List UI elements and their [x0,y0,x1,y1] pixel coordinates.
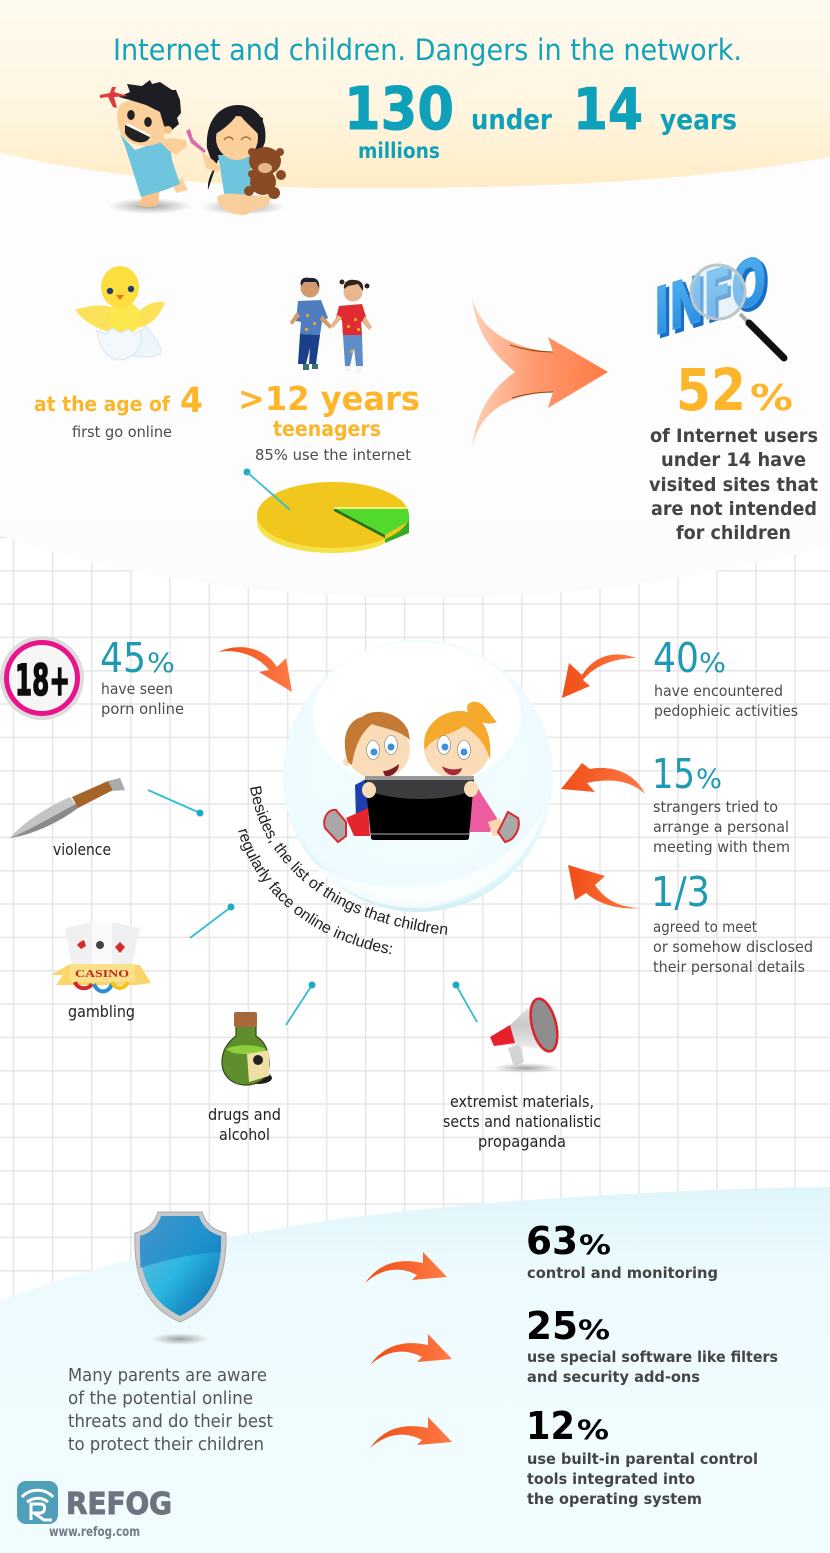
stat: 25 percent special software: use special software like filters [527,1348,778,1366]
stat: one third: 1/3 [651,868,710,916]
curved text: list of things children face: Besides, the list of things that children [250,786,448,935]
stat: 45 percent: % [147,648,175,679]
teddy bear [244,147,286,199]
icon: INFO with magnifying glass: INFO [657,245,769,354]
stat: 15 percent: % [696,764,722,795]
badge: 18+: 18+ [15,656,70,706]
stat: 63 percent control and monitoring: 63 [526,1219,578,1263]
stat: over 12 years teenagers: >12 years [238,379,420,418]
stat: one third: their personal details [653,958,805,976]
stat: 25 percent special software: % [578,1315,610,1346]
cream header band [0,0,830,188]
text: sites not intended for children: for children [676,522,791,544]
stat: 15 percent: strangers tried to [653,798,778,816]
stat: 25 percent special software: 25 [526,1304,578,1348]
text: sites not intended for children [649,425,818,544]
stat: over 12 years teenagers [238,379,420,464]
stat: 15 percent: 15 [652,750,695,798]
icon: shield [135,1212,226,1345]
curved text: list of things children face: regularly face online includes: [238,828,392,954]
arrow to 25 percent [370,1334,452,1365]
text: parents aware of threats: Many parents are aware [68,1365,267,1386]
pie leader line [244,468,290,510]
big orange arrow [472,297,608,448]
stat: 45 percent: have seen [101,680,173,698]
stat: 15 percent [652,750,790,856]
stat: 52 percent: % [750,378,793,419]
stat: 63 percent control and monitoring: % [579,1230,611,1261]
girl's head [424,702,497,779]
label: extremist materials with leader line: propaganda [478,1132,566,1151]
stat: 40 percent: have encountered [654,682,783,700]
girl's leg and shoe [470,775,519,842]
text: parents aware of threats: to protect their children [68,1434,264,1455]
icon: casino: CASINO [75,968,130,980]
arrow to bubble from 40 percent [562,654,636,698]
label: violence with leader line: violence [53,840,111,859]
label: extremist materials with leader line: sects and nationalistic [443,1112,601,1131]
arrow to 63 percent [365,1252,447,1283]
stat: over 12 years teenagers: 85% use the internet [255,446,411,464]
boy figure [117,80,188,207]
title: Internet and children. Dangers in the network. [113,33,742,67]
boy's head [343,712,410,779]
icon: megaphone [490,996,562,1073]
stat: 45 percent [100,634,184,718]
white upper panel [0,140,830,598]
stat: 45 percent: porn online [101,700,184,718]
central bubble [283,640,553,912]
stat: one third [651,868,813,976]
text: sites not intended for children: of Internet users [650,425,818,447]
stat: 52 percent: 52 [676,356,746,424]
icon: casino [51,922,151,992]
label: violence with leader line [53,790,204,859]
arrow to 12 percent [370,1417,452,1448]
stat: one third: agreed to meet [653,918,757,936]
stat: 63 percent control and monitoring [526,1219,718,1282]
text: sites not intended for children: under 14 have [661,449,806,471]
icon: boy and girl holding hands [290,278,372,373]
stat: 40 percent [653,634,798,720]
icon: INFO with magnifying glass [654,242,784,358]
text: sites not intended for children: visited sites that [649,474,818,496]
stat: 15 percent: meeting with them [653,838,790,856]
arrow to bubble from one third [568,865,642,908]
stat: 130 millions under 14 years: 14 [573,77,643,143]
tablet [362,776,478,840]
icon: chick hatching from egg [75,266,165,360]
stat: age of 4: first go online [72,423,172,441]
girl figure [186,105,272,215]
stat: age of 4: at the age of [34,392,170,416]
icon: two cartoon children with toys [100,80,286,215]
stat: age of 4 [34,381,203,441]
stat: 130 millions under 14 years: millions [358,139,440,163]
icon: knife [10,778,125,838]
stat: 63 percent control and monitoring: control and monitoring [527,1264,718,1282]
stat: over 12 years teenagers: teenagers [273,417,381,441]
stat: 130 millions under 14 years [344,74,737,163]
stat: 40 percent: pedophieic activities [654,702,798,720]
stat: 12 percent built-in parental control [526,1404,758,1508]
label: drugs and alcohol with leader line: drugs and [208,1105,281,1124]
stat: 12 percent built-in parental control: use built-in parental control [527,1450,758,1468]
arrow to bubble from 45 percent [218,647,292,692]
label: drugs and alcohol with leader line: alcohol [219,1125,270,1144]
text: sites not intended for children: are not intended [651,498,817,520]
stat: 130 millions under 14 years: years [660,103,737,136]
label: gambling with leader line: gambling [68,1002,135,1021]
stat: 12 percent built-in parental control: the operating system [527,1490,702,1508]
children with tablet [324,702,519,842]
text: parents aware of threats: threats and do their best [68,1411,273,1432]
logo: REFOG: REFOG [66,1487,172,1522]
stat: 130 millions under 14 years: under [471,103,552,136]
label: drugs and alcohol with leader line [208,982,316,1144]
icon: poison bottle [222,1012,272,1085]
toy plane [100,87,128,108]
stat: 12 percent built-in parental control: tools integrated into [527,1470,695,1488]
text: parents aware of threats: of the potential online [68,1388,253,1409]
stat: 12 percent built-in parental control: % [577,1415,609,1446]
boy's leg and shoe [324,778,370,842]
logo: REFOG: www.refog.com [49,1525,140,1540]
stat: 40 percent: % [699,648,726,679]
text: parents aware of threats [68,1365,273,1455]
arrow to bubble from 15 percent [561,763,645,794]
stat: 12 percent built-in parental control: 12 [526,1404,575,1448]
stat: 25 percent special software: and security add-ons [527,1368,700,1386]
stat: 52 percent [676,356,793,424]
stat: 130 millions under 14 years: 130 [344,74,454,143]
pale blue footer panel [0,1187,830,1553]
background grid [0,530,830,1320]
label: extremist materials with leader line [443,982,601,1151]
stat: age of 4: 4 [180,381,203,421]
badge: 18+ [0,636,84,720]
stat: 45 percent: 45 [100,634,146,682]
stat: one third: or somehow disclosed [653,938,813,956]
icon: INFO with magnifying glass: INFO [654,242,766,351]
label: extremist materials with leader line: extremist materials, [450,1092,594,1111]
stat: 40 percent: 40 [653,634,699,682]
logo: REFOG [17,1481,172,1540]
stat: 25 percent special software [526,1304,778,1386]
label: gambling with leader line [68,904,234,1021]
pie chart: 85% use the internet [244,468,409,553]
stat: 15 percent: arrange a personal [653,818,789,836]
